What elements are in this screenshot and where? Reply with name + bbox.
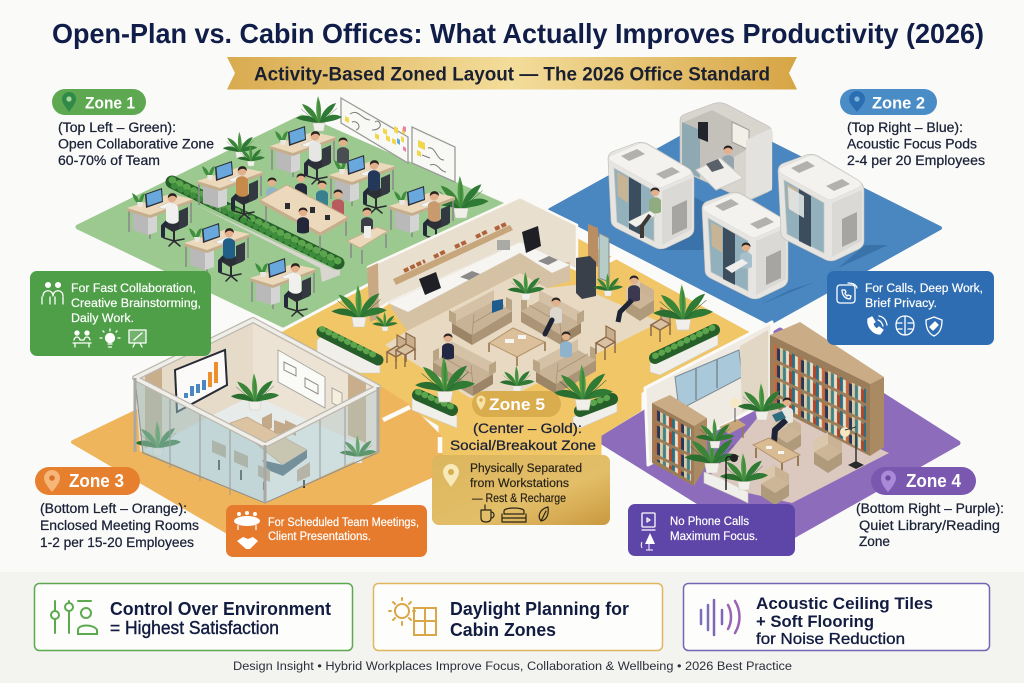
floor: zone 4 purple <box>599 330 958 548</box>
open pod with person <box>680 103 772 201</box>
zone 4 pill <box>871 467 976 495</box>
sofas and coffee table <box>433 290 596 396</box>
icons: cup, sofa, leaf <box>481 505 548 522</box>
lounge floor <box>385 273 660 398</box>
icon: sun and window <box>389 598 436 635</box>
zone 5 description: Social/Breakout Zone <box>450 438 596 453</box>
zone 2 callout: For Calls, Deep Work, <box>865 281 983 295</box>
kitchen counter and food shelf <box>388 224 570 331</box>
zone 2 callout: Brief Privacy. <box>865 296 937 310</box>
pod shadows <box>660 195 888 305</box>
zone 4 description: (Bottom Right – Purple): <box>856 501 1004 516</box>
room floor <box>140 393 378 503</box>
footer note: Design Insight • Hybrid Workplaces Improve Focus, Collaboration & Wellbeing • 2026 Best Practice <box>233 659 792 673</box>
card: daylight planning: Daylight Planning for <box>450 599 629 619</box>
planter: right <box>650 327 718 375</box>
zone 5 callout: from Workstations <box>470 476 569 490</box>
card: daylight planning: Cabin Zones <box>450 620 556 640</box>
zone 5 description <box>450 421 596 453</box>
zone 5 pill <box>472 391 561 417</box>
zone 2 description: 2-4 per 20 Employees <box>847 153 985 168</box>
plants in room <box>135 373 376 463</box>
zone 4 callout: No Phone Calls <box>670 514 749 528</box>
zone 1 description: (Top Left – Green): <box>58 120 176 135</box>
zone 1 callout: Creative Brainstorming, <box>71 296 201 310</box>
zone 1 description: 60-70% of Team <box>58 153 160 168</box>
icon: sliders and person <box>51 601 97 634</box>
zone 4 description: Quiet Library/Reading <box>859 518 1000 533</box>
water dispenser <box>576 256 596 299</box>
icon: phone in frame <box>837 283 857 303</box>
icon: book screen <box>642 513 655 530</box>
icon: handshake <box>237 537 258 549</box>
plants <box>223 96 489 218</box>
zone 2 pill: Zone 2 <box>872 94 925 112</box>
zone 5 callout: Physically Separated <box>470 461 582 475</box>
whiteboard on wall <box>278 350 342 408</box>
zone 3 description: (Bottom Left – Orange): <box>40 501 187 516</box>
title: Open-Plan vs. Cabin Offices: What Actually Improves Productivity (2026) <box>52 18 984 49</box>
plant and reader in armchair <box>738 383 801 455</box>
icon: two people <box>42 283 63 304</box>
illustration: zone 2 acoustic focus pods <box>608 103 888 305</box>
zone 3 callout: For Scheduled Team Meetings, <box>268 515 419 529</box>
zone 1 pill <box>52 89 146 115</box>
zone 1 callout: For Fast Collaboration, <box>71 281 196 295</box>
zone 5 description: (Center – Gold): <box>473 421 582 436</box>
zone 3 description <box>40 501 199 550</box>
zone 1 callout <box>30 271 211 356</box>
small stand table <box>347 208 388 264</box>
meeting person beside whiteboard <box>337 138 349 164</box>
illustration: zone 1 open collaborative workstations <box>127 96 489 316</box>
zone 2 callout <box>827 271 994 345</box>
back walls <box>135 320 253 452</box>
subtitle ribbon <box>227 57 797 90</box>
bottom band <box>0 572 1024 683</box>
icon: desk lamp <box>641 533 655 550</box>
lounge chairs <box>387 276 670 369</box>
hedge planter <box>172 180 340 282</box>
card: acoustic ceiling tiles: Acoustic Ceiling Tiles <box>756 594 933 613</box>
pod: front <box>702 192 788 299</box>
zone 3 pill: Zone 3 <box>69 471 124 491</box>
armchairs and floor lamp <box>761 427 864 505</box>
window wall <box>645 322 772 465</box>
desks with seated workers <box>127 126 455 316</box>
zone 4 pill: Zone 4 <box>906 471 961 491</box>
illustration: zone 3 enclosed meeting room <box>135 320 378 503</box>
side table and lamp <box>719 398 746 445</box>
card: daylight planning <box>374 584 662 650</box>
zone 2 description: Acoustic Focus Pods <box>847 136 977 152</box>
zone 4 description <box>856 501 1004 549</box>
zone 4 description: Zone <box>859 534 890 549</box>
zone 4 callout: Maximum Focus. <box>670 529 758 543</box>
subtitle ribbon: Activity-Based Zoned Layout — The 2026 Office Standard <box>254 64 770 86</box>
zone 3 callout: Client Presentations. <box>268 529 371 543</box>
zone 3 description: 1-2 per 15-20 Employees <box>40 535 194 550</box>
zone 3 callout <box>226 505 427 557</box>
card: acoustic ceiling tiles <box>684 584 990 650</box>
card: control over environment <box>34 584 352 650</box>
floor: zone 5 gold <box>283 208 748 462</box>
zone 2 pill <box>840 89 937 115</box>
zone 5 callout <box>432 455 610 525</box>
glass front walls <box>135 320 378 503</box>
zone 4 callout <box>628 504 795 556</box>
card: control over environment: = Highest Satisfaction <box>110 618 279 638</box>
icon: meeting table <box>234 511 260 530</box>
icons: call, brain, shield <box>868 316 942 336</box>
large bookshelf <box>770 322 884 456</box>
zone 1 description <box>58 120 214 168</box>
zone 3 description: Enclosed Meeting Rooms <box>40 518 199 533</box>
card: control over environment: Control Over Environment <box>110 599 331 619</box>
coffee table <box>753 438 800 472</box>
lounge plants <box>331 272 713 410</box>
wall screen with bar chart <box>175 350 227 412</box>
card: acoustic ceiling tiles: for Noise Reduction <box>756 631 905 648</box>
card: acoustic ceiling tiles: + Soft Flooring <box>756 612 874 631</box>
planter with plants and desk lamp <box>684 418 768 503</box>
whiteboards <box>341 98 455 182</box>
floor: zone 1 green <box>78 117 507 325</box>
planter: bottom left <box>412 392 457 428</box>
small bookshelf <box>652 395 707 486</box>
zone 1 pill: Zone 1 <box>85 94 135 112</box>
pod: call <box>608 142 694 249</box>
zone 3 pill <box>35 467 140 495</box>
zone 2 description <box>847 120 985 168</box>
library floor <box>704 400 889 503</box>
collaboration table <box>260 174 348 250</box>
planter: bottom right <box>573 396 617 428</box>
zone 2 description: (Top Right – Blue): <box>847 120 963 135</box>
zone 5 pill: Zone 5 <box>489 395 545 414</box>
icon: location pin <box>443 464 459 487</box>
zone 1 description: Open Collaborative Zone <box>58 136 214 152</box>
kitchen wall <box>367 197 609 322</box>
zone 1 callout: Daily Work. <box>71 311 134 325</box>
icon: sound waves <box>701 600 740 635</box>
illustration: zone 4 quiet library <box>645 322 889 505</box>
pod: right <box>778 154 864 261</box>
illustration: zone 5 social breakout lounge <box>317 197 718 428</box>
planter: left <box>317 329 380 373</box>
meeting table with chairs <box>212 413 310 490</box>
floor: zone 2 blue <box>550 117 940 323</box>
icons: teamwork, idea, presentation <box>73 329 146 347</box>
zone 5 callout: — Rest & Recharge <box>472 491 566 505</box>
floor: zone 3 orange <box>73 338 440 552</box>
